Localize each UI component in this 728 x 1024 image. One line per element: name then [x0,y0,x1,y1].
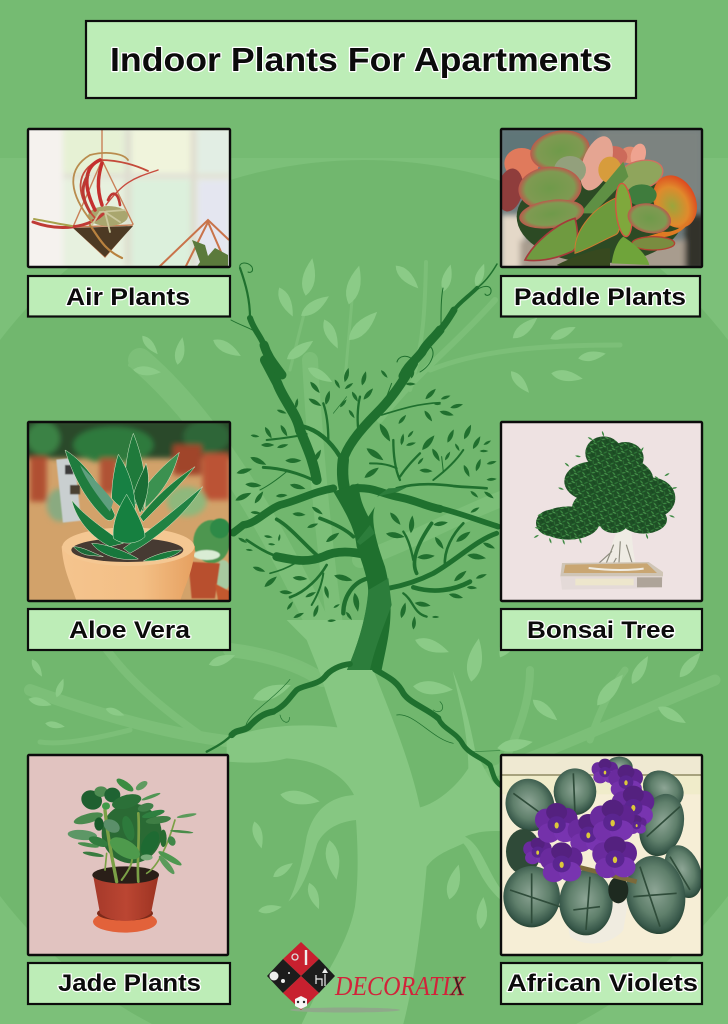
panel: paddle plants [494,126,705,316]
tree crown tips [231,263,497,376]
tree roots [207,664,501,785]
label: aloe vera [28,609,230,650]
central tree [207,263,501,785]
label: bonsai tree [501,609,702,650]
panel: air plants [20,120,230,316]
panel: aloe vera [23,418,237,650]
label: african violets [501,963,702,1004]
label: jade plants: Jade Plants [58,970,201,997]
photo: bonsai tree [501,422,702,601]
photo: jade plant in red pot [28,755,228,955]
label: aloe vera: Aloe Vera [69,617,191,644]
label: air plants [28,276,230,316]
panel: african violets [497,755,709,1004]
label: african violets: African Violets [507,970,698,997]
photo: aloe vera in orange pot [23,418,237,602]
title: Indoor Plants For Apartments [110,41,612,78]
photo: air plant in hanging terrarium [29,130,229,266]
trunk [333,483,391,670]
label: air plants: Air Plants [66,284,190,311]
label: paddle plants [501,276,700,316]
logo: decoratix [267,942,466,1012]
tree branches [233,360,498,617]
tree leaves [234,367,497,630]
logo wordmark: DECORATIX [334,971,466,1001]
label: paddle plants: Paddle Plants [514,284,686,311]
photo: african violets [497,755,709,955]
bonsai foliage [536,436,675,540]
panel: jade plants [28,755,230,1004]
bonsai tray [560,562,663,576]
panel: bonsai tree [501,422,702,650]
bonsai trunk [602,528,635,562]
label: bonsai tree: Bonsai Tree [527,617,675,644]
light tree trunk [227,620,507,1024]
logo mark [267,942,335,1010]
label: jade plants [28,963,230,1004]
title [86,21,636,98]
photo: paddle plant [502,130,701,266]
